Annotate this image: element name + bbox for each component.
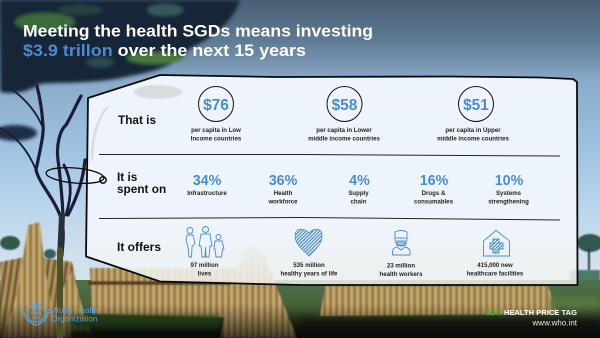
- icon: WHO emblem: [23, 302, 49, 325]
- icon: healthcare facility: [484, 230, 510, 256]
- cost upper middle income: [437, 86, 509, 142]
- dark grass: [70, 296, 600, 338]
- 36% health workforce: [267, 173, 298, 206]
- caption: healthcare facilities: 415,000 new: [477, 262, 513, 269]
- 4% supply chain: chain: [351, 198, 367, 206]
- 36% health workforce: workforce: [267, 198, 298, 206]
- icon: health worker: [392, 230, 410, 255]
- cost low income: Income countries: [191, 136, 242, 142]
- tree trunks: [0, 86, 85, 338]
- cost lower middle income: $58: [332, 97, 358, 114]
- source: SDG health price tag: [485, 308, 578, 328]
- 16% drugs and consumables: 16%: [420, 173, 449, 189]
- label: It is spent on: It is: [117, 170, 138, 184]
- WHO wordmark: Organization: [51, 314, 98, 324]
- 10% systems strengthening: 10%: [495, 173, 524, 189]
- WHO logo: [23, 302, 99, 325]
- ghost tree watermark: [92, 85, 182, 160]
- lower shade over the ground: [0, 304, 600, 338]
- caption: healthcare facilities: healthcare facilities: [467, 270, 524, 278]
- caption: healthy years of life: healthy years of life: [281, 270, 338, 278]
- caption: 23 million health workers: 23 million: [387, 262, 415, 270]
- 4% supply chain: [348, 173, 370, 206]
- label: That is: That is: [118, 113, 156, 127]
- 36% health workforce: Health: [274, 190, 293, 197]
- 16% drugs and consumables: [414, 173, 454, 206]
- icon: family: [186, 226, 224, 257]
- source: SDG health price tag: www.who.int: [532, 318, 578, 328]
- 36% health workforce: 36%: [269, 173, 298, 189]
- row: It offers: [117, 226, 524, 278]
- cost lower middle income: [308, 86, 380, 142]
- title: Meeting the health SGDs means investing: [23, 22, 373, 40]
- tag string and hole: [45, 166, 106, 185]
- cost upper middle income: per capita in Upper: [445, 127, 501, 134]
- WHO wordmark: World Health: [51, 306, 99, 315]
- 16% drugs and consumables: consumables: [414, 198, 454, 206]
- cost low income: per capita in Low: [191, 127, 241, 134]
- icon: heart: [295, 229, 322, 256]
- source: SDG health price tag: SDG HEALTH PRICE TAG: [485, 308, 577, 317]
- cost lower middle income: per capita in Lower: [316, 127, 372, 134]
- cost lower middle income: middle income countries: [308, 136, 380, 142]
- 34% infrastructure: 34%: [193, 173, 222, 189]
- hay stacks on the left and centre: [0, 222, 297, 338]
- cost low income: [191, 86, 242, 142]
- row: That is: [118, 86, 509, 142]
- cost upper middle income: $51: [463, 97, 489, 114]
- 10% systems strengthening: strengthening: [488, 198, 529, 206]
- caption: 23 million health workers: health workers: [379, 271, 423, 278]
- 10% systems strengthening: Systems: [496, 190, 522, 197]
- row: It is spent on: [117, 170, 529, 206]
- label: It is spent on: spent on: [117, 182, 166, 196]
- 16% drugs and consumables: Drugs &: [422, 190, 446, 197]
- tree canopy: [0, 0, 240, 141]
- 4% supply chain: Supply: [348, 190, 369, 197]
- cost low income: $76: [203, 97, 229, 114]
- caption: healthy years of life: 535 million: [293, 262, 325, 269]
- hay fence band: [88, 268, 558, 318]
- title: [23, 22, 373, 60]
- 34% infrastructure: Infrastructure: [187, 190, 227, 197]
- 4% supply chain: 4%: [349, 173, 370, 189]
- caption: 97 million lives: 97 million: [190, 262, 219, 269]
- label: It offers: It offers: [117, 240, 161, 254]
- 34% infrastructure: [187, 173, 227, 197]
- price tag panel: [86, 75, 578, 285]
- 10% systems strengthening: [488, 173, 529, 206]
- title: $3.9 trillon over the next 15 years: [23, 42, 306, 60]
- tree line on the right and left: [0, 234, 600, 290]
- caption: 97 million lives: lives: [198, 270, 212, 278]
- cost upper middle income: middle income countries: [437, 136, 509, 142]
